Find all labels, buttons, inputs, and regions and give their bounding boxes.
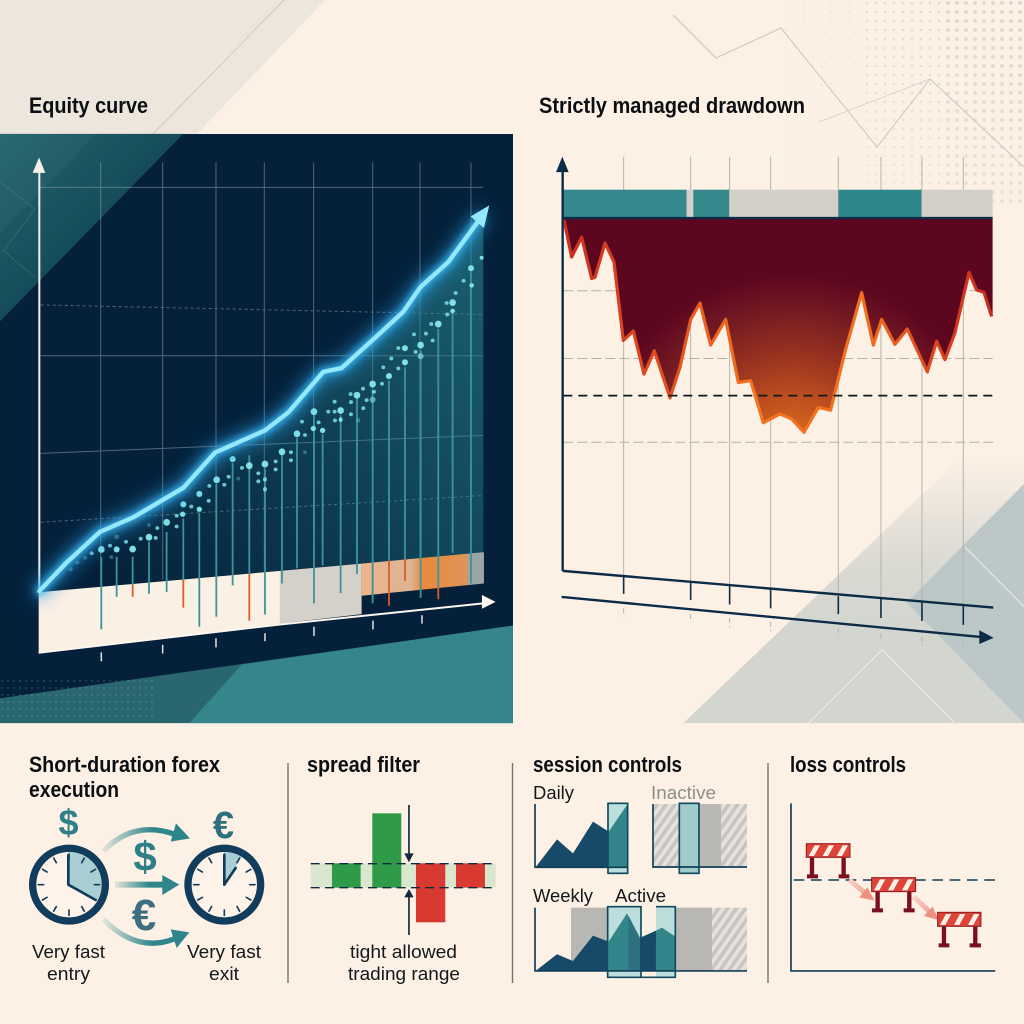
dot texture: [0, 677, 156, 721]
heading: spread filter: spread filter: [307, 752, 420, 777]
label: very fast exit: Very fast: [187, 941, 261, 962]
heading: Short-duration forex execution: execution: [29, 777, 119, 802]
divider: [288, 763, 768, 983]
icon: exit clock: [188, 848, 261, 921]
range arrows: [404, 805, 414, 935]
label: very fast entry: [32, 941, 105, 984]
axes: [556, 157, 994, 644]
chart: loss controls: [791, 803, 995, 971]
decoration: top-right halftone and lines: [673, 0, 1024, 207]
barrier 3: [938, 912, 981, 945]
barrier 1: [806, 844, 850, 876]
scatter dots: [69, 256, 484, 571]
heading: loss controls: loss controls: [790, 752, 906, 777]
horizontal guides: [563, 291, 993, 442]
label: very fast entry: Very fast: [32, 941, 105, 962]
drawdown line: [564, 220, 992, 432]
drawdown area: [563, 218, 993, 432]
label: very fast exit: [187, 941, 261, 984]
icon: currency symbols: €: [213, 805, 234, 847]
stems: [101, 272, 471, 629]
vertical gridlines: [624, 157, 963, 650]
session labels: Weekly: [533, 885, 594, 906]
label: very fast entry: entry: [47, 963, 91, 984]
area under curve: [39, 216, 483, 591]
label: tight allowed trading range: [348, 941, 460, 984]
heading: Short-duration forex execution: [29, 752, 221, 802]
barrier 2: [872, 878, 916, 910]
heading: Short-duration forex execution: Short-duration forex: [29, 752, 221, 777]
label: tight allowed trading range: trading range: [348, 963, 460, 984]
drawdown limit line: [563, 395, 995, 397]
axes: [33, 158, 496, 661]
chart: spread filter: [311, 805, 496, 935]
icon: currency symbols: $: [58, 802, 79, 843]
icon: currency symbols: €: [132, 891, 156, 940]
heading: Equity curve: Equity curve: [29, 93, 148, 118]
session bar: [563, 190, 993, 217]
heading: session controls: session controls: [533, 752, 682, 777]
gridlines: [41, 163, 483, 585]
session labels: Inactive: [651, 782, 716, 803]
icon: currency symbols: $: [133, 833, 157, 880]
panel: drawdown chart: [556, 157, 995, 650]
chart: equity: [33, 158, 496, 661]
session labels: [533, 782, 716, 906]
chart: daily active: [535, 803, 628, 873]
label: very fast exit: exit: [209, 963, 239, 984]
chart: weekly active: [535, 907, 747, 977]
glowing equity line: [39, 205, 489, 591]
decoration: bottom-right triangles: [683, 397, 1024, 723]
step arrows: [849, 880, 939, 920]
icon: entry clock: [33, 848, 105, 921]
session labels: Active: [615, 885, 666, 906]
arrows: entry to exit: [103, 823, 190, 948]
icon: currency symbols: [58, 802, 234, 940]
chart: daily inactive: [653, 803, 747, 873]
panel: equity curve: [0, 134, 513, 723]
band: session strip: [39, 552, 484, 653]
heading: Strictly managed drawdown: Strictly managed drawdown: [539, 93, 805, 118]
session labels: Daily: [533, 782, 575, 803]
decoration: top-left wedge: [0, 0, 325, 134]
label: tight allowed trading range: tight allowed: [350, 941, 457, 962]
panel geometry: teal wedges and bottom band: [0, 134, 513, 723]
